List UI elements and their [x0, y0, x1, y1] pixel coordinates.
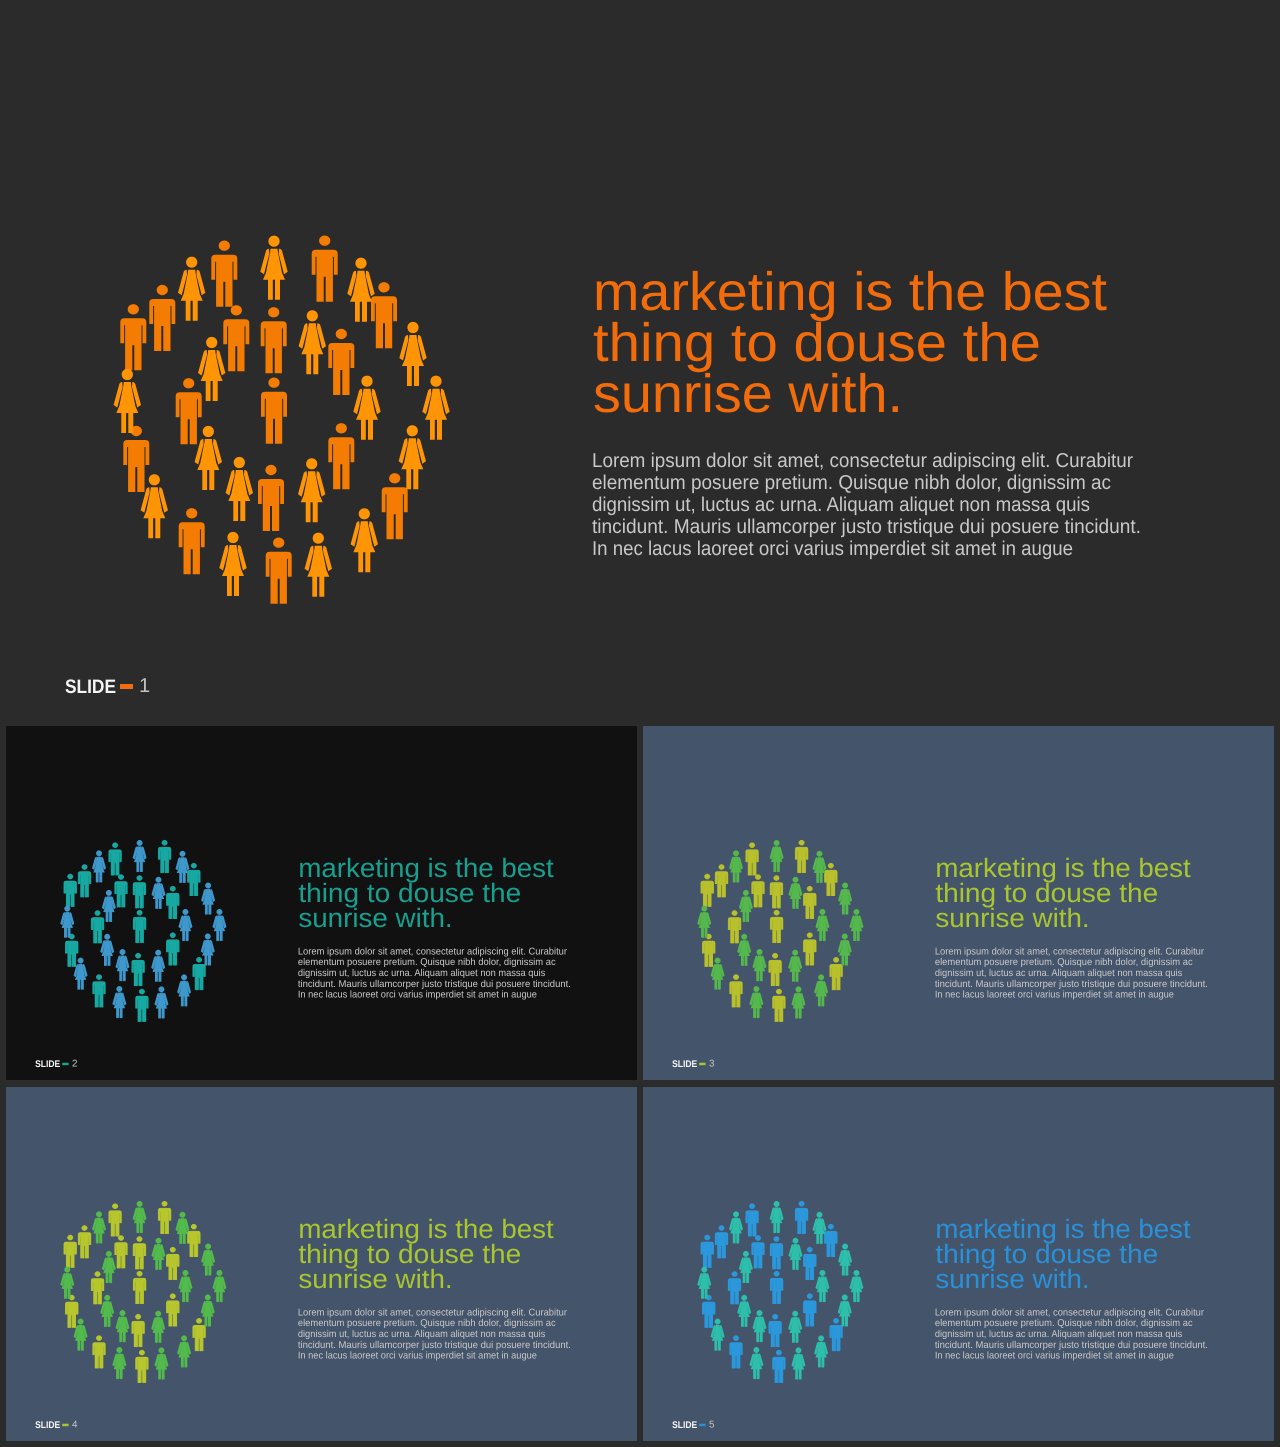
slide label — [35, 1419, 78, 1431]
title: thing to douse the — [298, 878, 521, 908]
slide label: SLIDE — [65, 676, 116, 698]
body text: In nec lacus laoreet orci varius imperdiet sit amet in augue — [298, 989, 537, 1000]
body text: tincidunt. Mauris ullamcorper justo tristique dui posuere tincidunt. — [298, 978, 571, 989]
body text — [592, 450, 1141, 560]
slide label — [35, 1058, 78, 1070]
title: thing to douse the — [298, 1239, 521, 1269]
body text: elementum posuere pretium. Quisque nibh dolor, dignissim ac — [592, 472, 1111, 494]
slide label: 2 — [72, 1058, 78, 1069]
body text: dignissim ut, luctus ac urna. Aliquam aliquet non massa quis — [592, 494, 1090, 516]
title — [935, 853, 1191, 933]
slide label: 1 — [139, 675, 150, 697]
body text: In nec lacus laoreet orci varius imperdiet sit amet in augue — [592, 538, 1073, 560]
title — [593, 262, 1107, 424]
body text: Lorem ipsum dolor sit amet, consectetur adipiscing elit. Curabitur — [592, 450, 1133, 472]
body text: dignissim ut, luctus ac urna. Aliquam aliquet non massa quis — [298, 1329, 545, 1339]
body text — [298, 946, 571, 1000]
body text — [298, 1307, 571, 1361]
body text: dignissim ut, luctus ac urna. Aliquam aliquet non massa quis — [298, 968, 545, 978]
icon: circle of people — [698, 840, 863, 1022]
slide label: SLIDE — [672, 1059, 697, 1070]
title: marketing is the best — [593, 262, 1107, 322]
title — [935, 1214, 1191, 1294]
body text: elementum posuere pretium. Quisque nibh dolor, dignissim ac — [298, 957, 556, 968]
body text — [935, 1307, 1208, 1361]
slide label: SLIDE — [35, 1059, 60, 1070]
panel: slide 3 — [643, 726, 1274, 1080]
panel: slide 1 — [65, 236, 1141, 698]
body text — [935, 946, 1208, 1000]
title: sunrise with. — [935, 903, 1090, 933]
slide label: SLIDE — [35, 1420, 60, 1431]
body text: In nec lacus laoreet orci varius imperdiet sit amet in augue — [935, 989, 1174, 1000]
title — [298, 853, 554, 933]
title: marketing is the best — [935, 853, 1191, 883]
slide label: 4 — [72, 1419, 78, 1430]
icon: circle of people — [61, 840, 226, 1022]
panel: slide 2 — [6, 726, 637, 1080]
title: sunrise with. — [298, 903, 453, 933]
slide label — [65, 675, 150, 698]
body text: Lorem ipsum dolor sit amet, consectetur adipiscing elit. Curabitur — [935, 946, 1204, 957]
slide label: SLIDE — [672, 1420, 697, 1431]
title: marketing is the best — [298, 853, 554, 883]
body text: elementum posuere pretium. Quisque nibh dolor, dignissim ac — [935, 957, 1193, 968]
body text: Lorem ipsum dolor sit amet, consectetur adipiscing elit. Curabitur — [298, 946, 567, 957]
body text: In nec lacus laoreet orci varius imperdiet sit amet in augue — [935, 1350, 1174, 1361]
body text: Lorem ipsum dolor sit amet, consectetur adipiscing elit. Curabitur — [298, 1307, 567, 1318]
body text: dignissim ut, luctus ac urna. Aliquam aliquet non massa quis — [935, 968, 1182, 978]
slide label: 5 — [709, 1419, 715, 1430]
body text: tincidunt. Mauris ullamcorper justo tristique dui posuere tincidunt. — [592, 516, 1141, 538]
body text: Lorem ipsum dolor sit amet, consectetur adipiscing elit. Curabitur — [935, 1307, 1204, 1318]
title: marketing is the best — [298, 1214, 554, 1244]
title: thing to douse the — [935, 878, 1158, 908]
icon: circle of people — [61, 1201, 226, 1383]
title — [298, 1214, 554, 1294]
title: sunrise with. — [593, 364, 903, 424]
body text: In nec lacus laoreet orci varius imperdiet sit amet in augue — [298, 1350, 537, 1361]
icon: circle of people — [698, 1201, 863, 1383]
title: thing to douse the — [935, 1239, 1158, 1269]
slide label — [672, 1058, 715, 1070]
slide label: 3 — [709, 1058, 715, 1069]
body text: elementum posuere pretium. Quisque nibh dolor, dignissim ac — [935, 1318, 1193, 1329]
title: marketing is the best — [935, 1214, 1191, 1244]
title: sunrise with. — [935, 1264, 1090, 1294]
icon: circle of people — [114, 236, 450, 604]
panel: slide 4 — [6, 1087, 637, 1441]
slide label — [672, 1419, 715, 1431]
body text: tincidunt. Mauris ullamcorper justo tristique dui posuere tincidunt. — [298, 1339, 571, 1350]
body text: tincidunt. Mauris ullamcorper justo tristique dui posuere tincidunt. — [935, 1339, 1208, 1350]
body text: tincidunt. Mauris ullamcorper justo tristique dui posuere tincidunt. — [935, 978, 1208, 989]
panel: slide 5 — [643, 1087, 1274, 1441]
body text: dignissim ut, luctus ac urna. Aliquam aliquet non massa quis — [935, 1329, 1182, 1339]
body text: elementum posuere pretium. Quisque nibh dolor, dignissim ac — [298, 1318, 556, 1329]
title: sunrise with. — [298, 1264, 453, 1294]
title: thing to douse the — [593, 313, 1041, 373]
